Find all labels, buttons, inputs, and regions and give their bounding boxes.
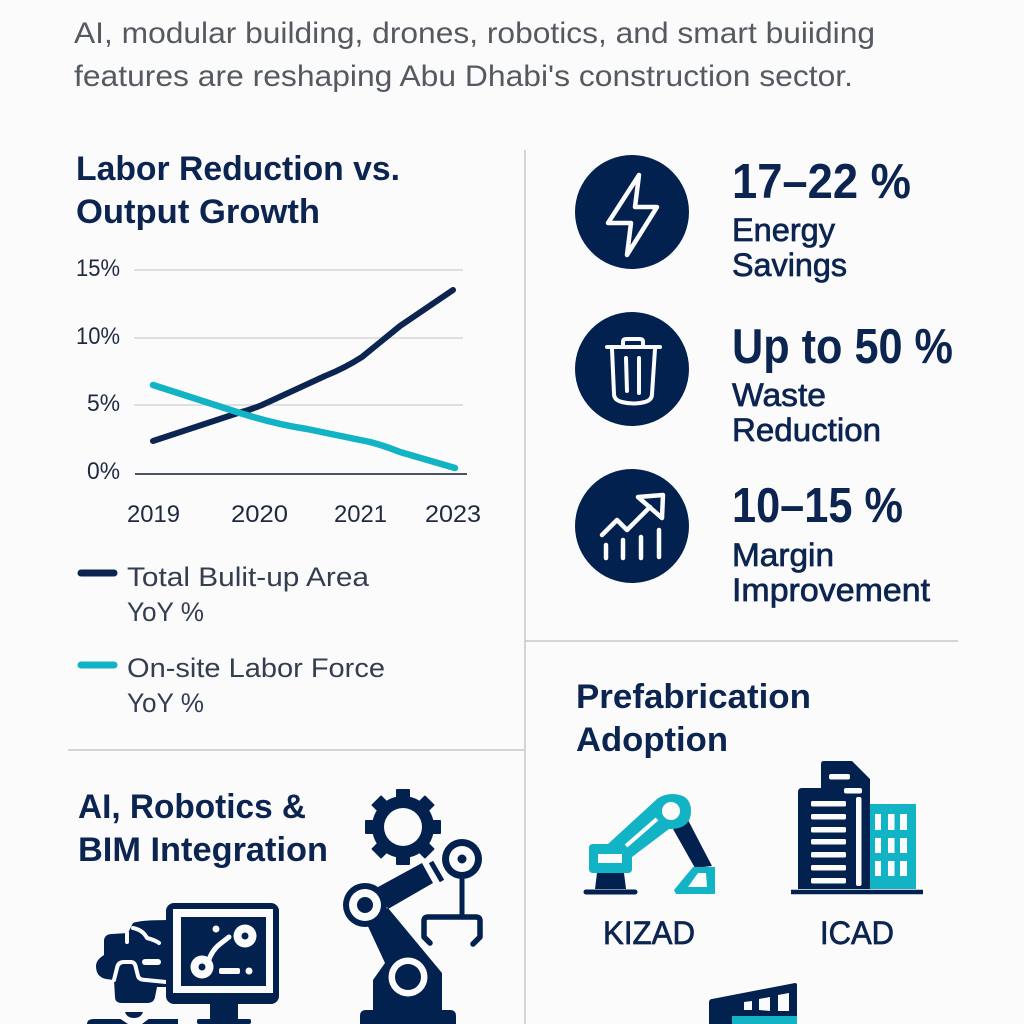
intro text: features are reshaping Abu Dhabi's construction sector. xyxy=(74,60,853,93)
metric: margin improvement: Margin xyxy=(732,537,834,573)
metric: margin improvement xyxy=(732,479,930,608)
metric: waste reduction: Waste xyxy=(732,377,826,413)
icon: robot arm with gear xyxy=(343,789,482,1024)
heading: labor reduction: Labor Reduction vs. xyxy=(76,150,400,188)
metric: waste reduction xyxy=(732,320,953,448)
line chart: 2023 xyxy=(425,501,481,528)
panel: prefabrication adoption xyxy=(576,678,923,1024)
heading: AI robotics xyxy=(78,788,328,869)
metric: margin improvement: 10–15 % xyxy=(732,479,903,533)
intro text xyxy=(74,17,875,93)
icon: growth chart xyxy=(575,469,689,583)
legend: On-site Labor Force xyxy=(127,653,385,683)
panel: AI robotics and BIM xyxy=(78,788,482,1024)
legend xyxy=(81,562,385,718)
line chart: 5% xyxy=(87,390,120,417)
metric: energy savings: Energy xyxy=(732,212,835,248)
icon: KIZAD robot arm xyxy=(586,794,715,894)
metric: energy savings: 17–22 % xyxy=(732,155,911,209)
metric: margin improvement: Improvement xyxy=(732,572,930,608)
metric: waste reduction: Reduction xyxy=(732,412,881,448)
icon: head and monitor xyxy=(87,903,279,1024)
heading: prefabrication xyxy=(576,678,811,759)
line chart: 2020 xyxy=(231,501,288,528)
intro text: AI, modular building, drones, robotics, and smart buiiding xyxy=(74,17,875,50)
icon: trash bin xyxy=(575,312,689,426)
label: ICAD: ICAD xyxy=(820,915,894,951)
icon: ICAD buildings xyxy=(791,761,923,892)
line chart: 2019 xyxy=(127,501,180,528)
line chart: 15% xyxy=(76,255,120,282)
icon: energy bolt xyxy=(575,155,689,269)
line chart: 0% xyxy=(87,458,120,485)
legend: YoY % xyxy=(127,597,204,627)
label: KIZAD: KIZAD xyxy=(603,915,695,951)
line chart: 10% xyxy=(76,323,120,350)
line chart xyxy=(76,255,481,528)
legend: YoY % xyxy=(127,688,204,718)
metric: energy savings xyxy=(732,155,911,283)
heading: labor reduction: Output Growth xyxy=(76,193,320,231)
legend: Total Bulit-up Area xyxy=(127,562,370,592)
metric: energy savings: Savings xyxy=(732,247,847,283)
line chart: 2021 xyxy=(334,501,387,528)
panel: key metrics xyxy=(575,155,953,608)
heading: prefabrication: Prefabrication xyxy=(576,678,811,716)
heading: prefabrication: Adoption xyxy=(576,721,728,759)
heading: AI robotics: BIM Integration xyxy=(78,831,328,869)
heading: labor reduction xyxy=(76,150,400,231)
metric: waste reduction: Up to 50 % xyxy=(732,320,953,374)
panel: labor reduction vs output growth xyxy=(76,150,481,718)
icon: factory building xyxy=(709,983,797,1024)
heading: AI robotics: AI, Robotics & xyxy=(78,788,306,826)
